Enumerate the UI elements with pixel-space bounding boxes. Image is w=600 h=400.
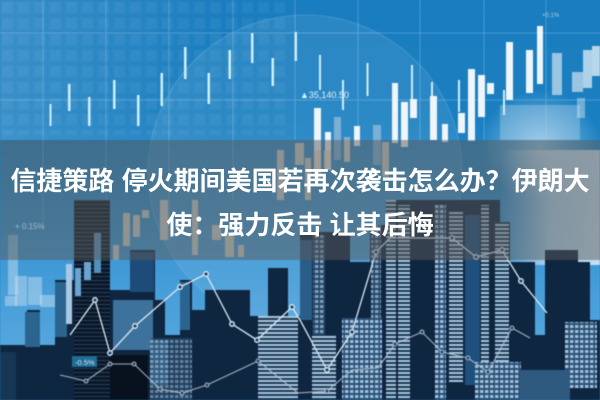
striped towers	[66, 200, 597, 400]
candlestick chart	[5, 26, 600, 307]
city skyline	[0, 200, 600, 400]
market value labels: +0.1%	[542, 13, 560, 19]
percentage tag: -0.5%	[75, 358, 95, 367]
percentage tag	[72, 356, 97, 367]
main dark tower	[74, 200, 148, 400]
title text: 信捷策路 停火期间美国若再次袭击怎么办？伊朗大	[10, 166, 590, 196]
semi-transparent title band	[0, 140, 600, 260]
title text	[10, 166, 590, 240]
market value labels	[300, 13, 560, 100]
muted candle bodies	[334, 117, 381, 165]
globe arc	[148, 15, 462, 329]
band percentage label: + 0.15%	[15, 222, 45, 231]
candle bodies	[314, 26, 600, 170]
line chart: upper series	[70, 236, 547, 372]
glowing wicks	[50, 32, 505, 126]
chart grid lines	[0, 0, 600, 240]
line chart: lower series	[60, 326, 530, 395]
title text: 使：强力反击 让其后悔	[166, 210, 434, 240]
pale candles behind the band	[113, 140, 389, 260]
blue glass blocks	[0, 215, 480, 400]
base silhouette	[0, 200, 600, 400]
market value labels: ▲35,140.50	[300, 90, 349, 100]
pale sky blocks on the left	[5, 235, 60, 307]
